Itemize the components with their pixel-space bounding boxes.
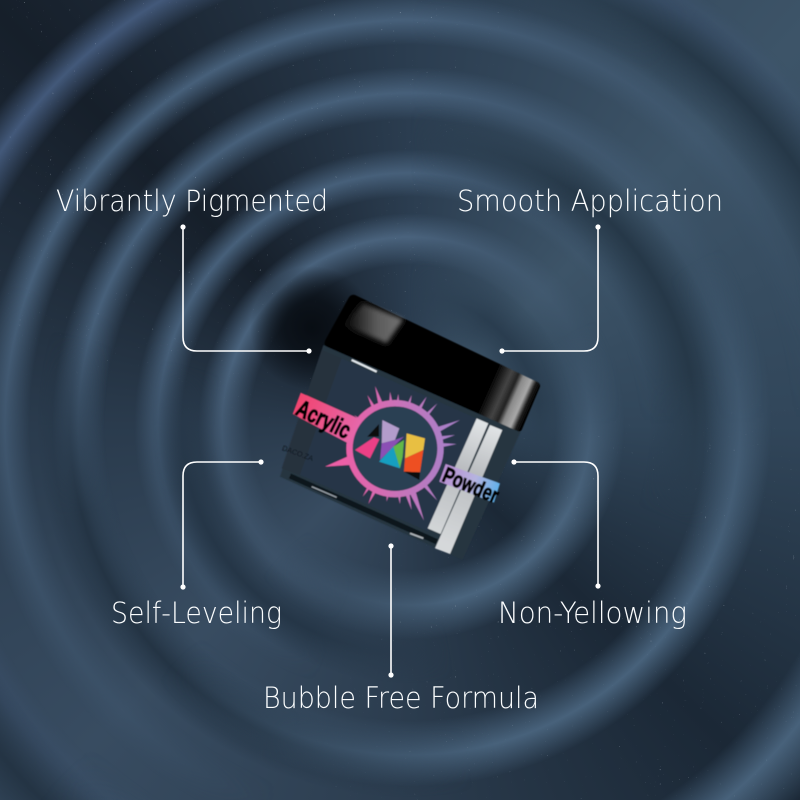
connector: Non-Yellowing bbox=[511, 459, 601, 589]
small printed text: DACO.ZA bbox=[281, 443, 315, 463]
label: Self-Leveling: Self-Leveling bbox=[111, 596, 282, 630]
connector: Vibrantly Pigmented bbox=[180, 224, 312, 354]
connector: Smooth Application bbox=[499, 224, 601, 354]
cap highlight bbox=[343, 303, 403, 343]
logo bbox=[355, 420, 425, 480]
label: Non-Yellowing: Non-Yellowing bbox=[498, 596, 687, 630]
left glass edge bbox=[282, 350, 342, 475]
splatter ring bbox=[325, 386, 460, 521]
jar body bbox=[280, 345, 521, 559]
jar cap bbox=[325, 295, 540, 432]
jar contents bbox=[298, 358, 480, 532]
jar shadow bbox=[250, 266, 374, 390]
product jar bbox=[280, 295, 540, 559]
Powder text: Powder bbox=[439, 462, 503, 508]
label: Smooth Application: Smooth Application bbox=[457, 184, 723, 218]
label: Bubble Free Formula: Bubble Free Formula bbox=[263, 681, 539, 715]
connector: Self-Leveling bbox=[180, 459, 264, 590]
label: Vibrantly Pigmented: Vibrantly Pigmented bbox=[56, 184, 328, 218]
white label strips bbox=[428, 418, 502, 554]
jar base reflections bbox=[290, 360, 437, 542]
connector: Bubble Free Formula bbox=[388, 543, 394, 678]
Acrylic band bbox=[293, 393, 362, 443]
Powder band bbox=[439, 464, 500, 503]
Acrylic text: Acrylic bbox=[292, 395, 355, 445]
logo disc bbox=[353, 406, 437, 491]
